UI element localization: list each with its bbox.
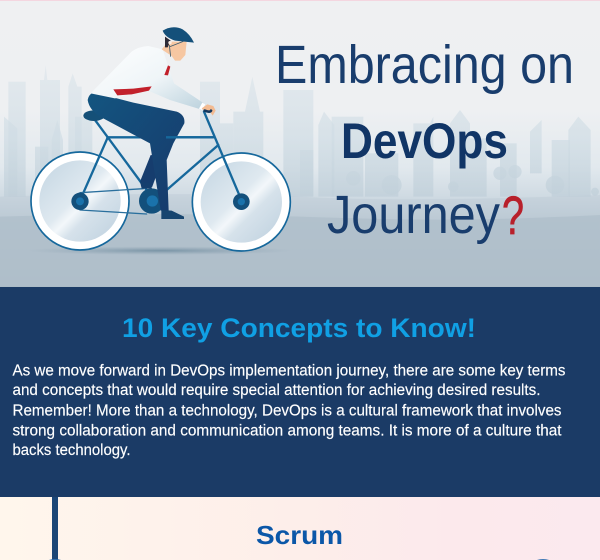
shoe xyxy=(161,210,184,219)
title: ? xyxy=(502,186,524,246)
handlebar stem overlay xyxy=(166,134,213,141)
intro paragraph: backs technology. xyxy=(12,442,130,459)
timeline line xyxy=(52,497,58,560)
ground shadow xyxy=(27,246,293,255)
title xyxy=(275,35,574,246)
hair and ear xyxy=(165,37,183,57)
bicycle frame xyxy=(80,112,240,214)
timeline node left xyxy=(47,559,63,560)
illustration: cyclist on bicycle xyxy=(27,27,293,255)
panel: hero header xyxy=(0,1,600,287)
far shoe xyxy=(140,182,152,189)
title: Journey xyxy=(327,185,500,245)
icon: chainring and hubs xyxy=(71,188,250,214)
top accent stripe xyxy=(0,0,600,1)
bike helmet xyxy=(163,27,194,43)
shirt xyxy=(91,46,204,109)
panel: introduction xyxy=(0,287,600,497)
intro paragraph: Remember! More than a technology, DevOps is a cultural framework that involves xyxy=(12,402,562,420)
timeline node right xyxy=(535,559,551,560)
title: DevOps xyxy=(341,113,508,169)
intro paragraph: As we move forward in DevOps implementation journey, there are some key terms xyxy=(12,362,566,380)
far leg xyxy=(140,155,163,187)
bicycle seat xyxy=(83,110,105,121)
city skyline background xyxy=(4,65,599,197)
panel: scrum section xyxy=(0,497,600,560)
head xyxy=(162,42,187,61)
intro paragraph: and concepts that would require special attention for achieving desired results. xyxy=(12,382,540,399)
intro paragraph: strong collaboration and communication among teams. It is more of a culture that xyxy=(12,422,562,440)
hand and grip xyxy=(202,104,216,116)
intro paragraph xyxy=(12,362,566,459)
near leg xyxy=(88,93,184,211)
ground bands xyxy=(0,194,600,287)
title: Embracing on xyxy=(275,35,574,95)
red tie xyxy=(113,65,170,95)
sleeve cuff xyxy=(199,103,205,110)
icon: front wheel xyxy=(192,153,290,251)
section heading: Scrum xyxy=(256,520,343,550)
icon: rear wheel xyxy=(31,152,129,250)
heading: 10 Key Concepts to Know! xyxy=(122,313,476,343)
